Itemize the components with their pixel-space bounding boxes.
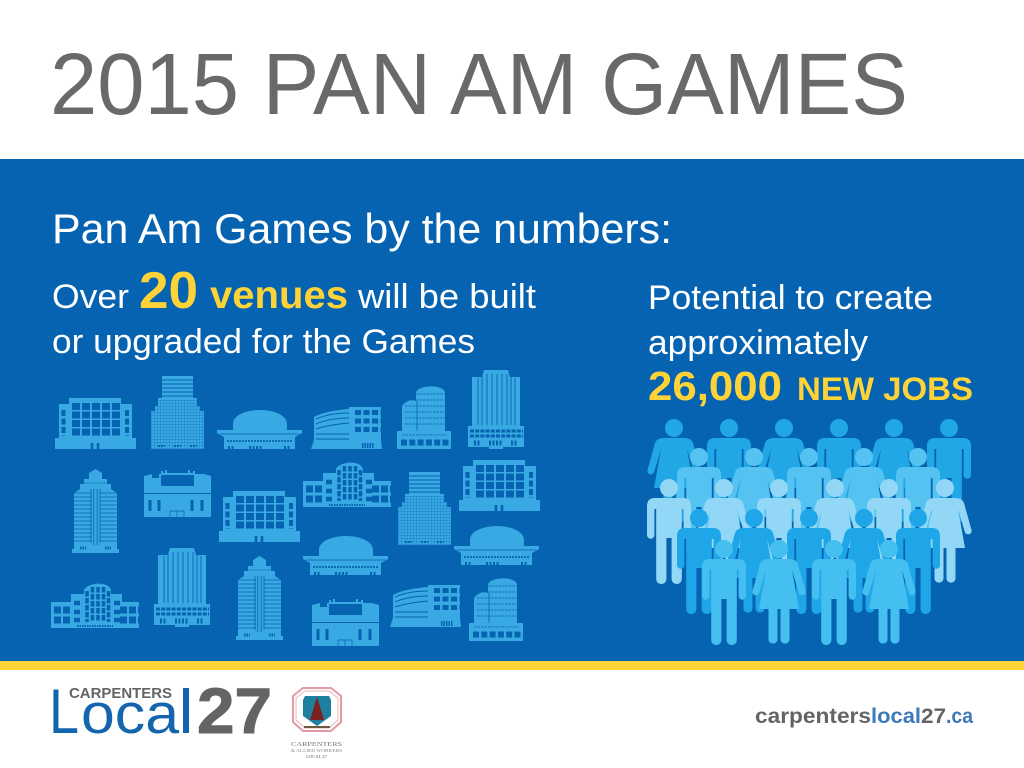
jobs statement: Potential to create bbox=[648, 279, 933, 317]
jobs statement: 26,000 bbox=[648, 363, 782, 409]
website url: carpenters bbox=[755, 705, 871, 728]
people: front row bbox=[702, 540, 916, 645]
logo: union seal bbox=[291, 688, 343, 759]
yellow divider band bbox=[0, 661, 1024, 670]
icon: stadium 2 bbox=[312, 599, 379, 646]
jobs statement bbox=[648, 279, 973, 409]
logo: Carpenters Local 27: oca bbox=[81, 682, 179, 746]
icon: twin cylinders 2 bbox=[469, 578, 523, 641]
icon: stadium 1 bbox=[144, 470, 211, 517]
venues statement: 20 bbox=[139, 262, 198, 320]
icon: domed arena 2 bbox=[303, 536, 388, 575]
icon: twin tower 1 bbox=[72, 469, 119, 553]
venues statement: will be built bbox=[357, 278, 537, 316]
icon: stepped tower 2 bbox=[398, 472, 451, 545]
subheading: Pan Am Games by the numbers: bbox=[52, 205, 672, 252]
icon: office block 3 bbox=[459, 460, 540, 511]
logo: Carpenters Local 27: L bbox=[49, 677, 79, 747]
icon: glass hall 2 bbox=[51, 584, 139, 628]
title: 2015 PAN AM GAMES bbox=[50, 36, 908, 133]
website url bbox=[755, 705, 973, 728]
icon: glass hall 1 bbox=[303, 463, 391, 507]
jobs statement: approximately bbox=[648, 324, 868, 362]
icon: twin tower 2 bbox=[236, 556, 283, 640]
seal emblem bbox=[293, 688, 341, 731]
icon: tall tower 2 bbox=[154, 548, 210, 627]
logo: union seal: LOCAL 27 bbox=[306, 754, 327, 759]
logo: Carpenters Local 27 bbox=[49, 675, 272, 747]
website url: .ca bbox=[946, 705, 973, 728]
people: second row bbox=[677, 448, 940, 553]
logo: Carpenters Local 27: 27 bbox=[197, 675, 272, 747]
venues statement: venues bbox=[210, 274, 348, 317]
icon: office block 1 bbox=[55, 398, 136, 449]
logo: union seal: & ALLIED WORKERS bbox=[291, 748, 343, 753]
website url: 27 bbox=[921, 705, 946, 728]
icon: curved block 2 bbox=[390, 585, 461, 627]
people: fourth row bbox=[677, 509, 940, 614]
venues statement: Over bbox=[52, 278, 129, 316]
blue main panel bbox=[0, 159, 1024, 661]
website url: local bbox=[871, 705, 921, 728]
icon: twin cylinders 1 bbox=[397, 386, 451, 449]
people: third row bbox=[647, 479, 972, 584]
venue building icons grid bbox=[51, 370, 540, 646]
icon: curved block 1 bbox=[311, 407, 382, 449]
venues statement bbox=[52, 262, 537, 361]
venues statement: or upgraded for the Games bbox=[52, 323, 475, 361]
icon: tall tower 1 bbox=[468, 370, 524, 449]
logo: Carpenters Local 27: CARPENTERS bbox=[69, 685, 172, 702]
icon: domed arena 1 bbox=[217, 410, 302, 449]
crowd of people icons bbox=[647, 419, 972, 645]
people: back row bbox=[647, 419, 971, 524]
icon: domed arena 3 bbox=[454, 526, 539, 565]
icon: office block 2 bbox=[219, 491, 300, 542]
icon: stepped tower 1 bbox=[151, 376, 204, 449]
jobs statement: NEW JOBS bbox=[797, 371, 973, 407]
seal caption: CARPENTERS bbox=[291, 741, 342, 748]
